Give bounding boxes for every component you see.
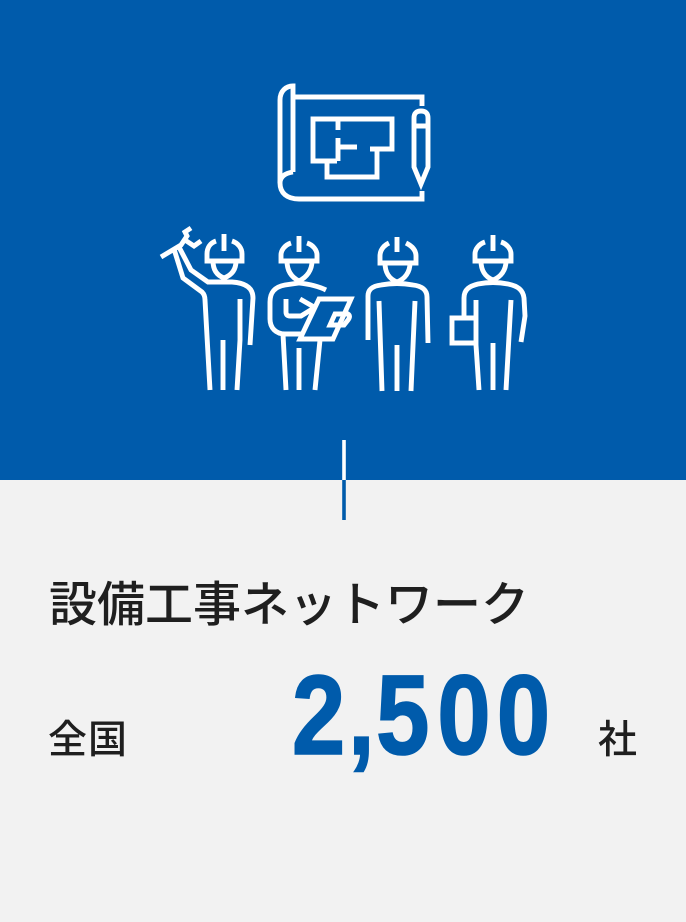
icon: pencil [414,111,428,184]
icon: worker with clipboard [270,236,351,390]
label: nationwide: 全国 [48,719,128,762]
heading: 設備工事ネットワーク [49,579,529,632]
illustration: blueprint, workers and connector [160,84,528,520]
icon: worker with box [452,235,525,390]
connector line [342,440,346,520]
panel: blue header [0,0,686,480]
icon: worker with wrench [161,228,253,390]
icon: standing worker [368,237,428,391]
icon: blueprint scroll [280,86,422,199]
label: companies: 社 [598,719,637,762]
big number: 2,500 [292,653,550,779]
